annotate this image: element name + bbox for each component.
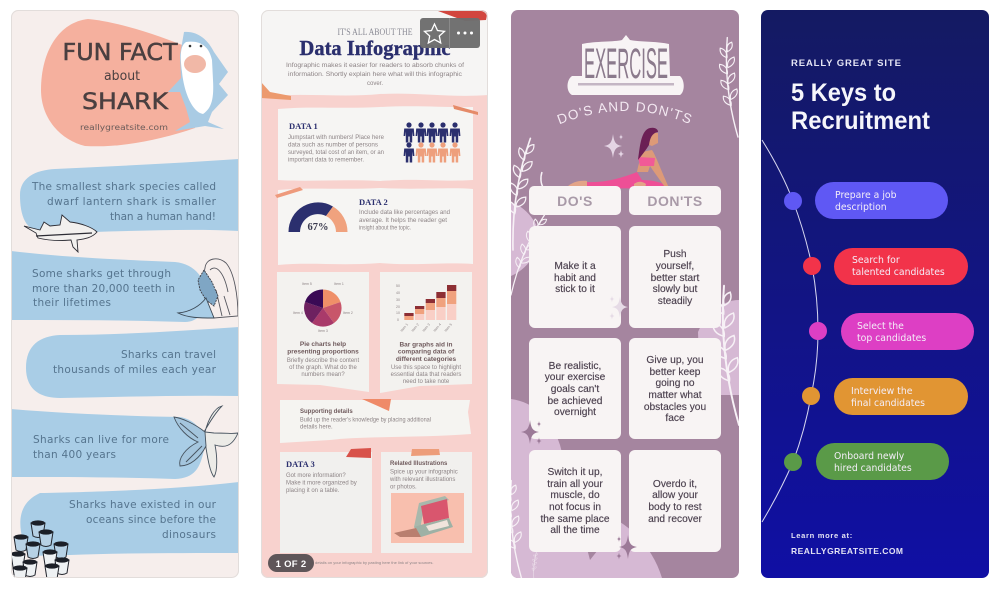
icon: sparkles (604, 134, 624, 158)
card: data 2: average. It helps the reader get (359, 218, 447, 224)
card: do 2: your exercise (545, 372, 606, 383)
exercise badge (568, 35, 684, 95)
card: don't 2: better keep (650, 367, 701, 378)
card: supporting details: Build up the reader's knowledge by placing additional (300, 418, 431, 424)
card: related illustrations: or photos. (390, 484, 417, 490)
card: related illustrations: Related Illustrations (390, 461, 448, 467)
card: do 2: overnight (554, 407, 596, 418)
card: data 3: Make it more organized by (286, 480, 357, 486)
tape on related illustrations (411, 449, 440, 456)
heading (286, 28, 464, 87)
step 2: talented candidates (852, 267, 945, 278)
band: fact 2 (11, 251, 206, 322)
band: fact 4 (11, 409, 204, 479)
card: do 3: all the time (550, 525, 600, 536)
panel: fun fact about shark (11, 10, 239, 582)
card: don't 2: obstacles you (644, 402, 706, 413)
heading: Infographic makes it easier for readers to absorb chunks of (286, 63, 464, 69)
card: do 1: Make it a (554, 261, 596, 272)
stacked bar chart: 40 (396, 291, 400, 295)
card: data 1: DATA 1 (289, 121, 318, 131)
stacked bar chart: Item 3 (422, 323, 431, 333)
card: don't 3 (629, 450, 721, 552)
fact 1 text: dwarf lantern shark is smaller (47, 196, 217, 208)
card: pie chart: Item 4 (293, 311, 303, 315)
card: pie chart: Item 5 (302, 282, 312, 286)
step 2 (803, 248, 968, 285)
tape on supporting details (362, 399, 391, 411)
band: fact 3 (26, 327, 239, 398)
step 5: Onboard newly (834, 451, 905, 462)
photo: pink box (391, 493, 464, 543)
title text: about (104, 69, 140, 84)
card: pie chart: Item 3 (318, 329, 328, 333)
card: do 3: Switch it up, (548, 467, 602, 478)
figure: yoga pose (567, 128, 670, 190)
card: do 2: be achieved (548, 396, 603, 407)
card: don't 1: slowly but (653, 284, 698, 295)
card: do 2: goals can't (551, 384, 599, 395)
card: related illustrations (381, 452, 472, 553)
icon: shark costume character (168, 32, 228, 131)
heading: IT'S ALL ABOUT THE (338, 28, 413, 38)
timeline curve (762, 140, 818, 522)
card: data 3 (280, 452, 372, 553)
icon: sparkles lower left (521, 420, 542, 445)
icon: lantern shark (24, 215, 97, 252)
icon: sparkles bottom (616, 535, 637, 560)
title text: SHARK (82, 90, 169, 115)
card: do 1 (529, 226, 621, 328)
card: don't 2: Give up, you (646, 355, 704, 366)
card: don't 3: allow your (652, 490, 699, 501)
fact 4 text (33, 434, 169, 461)
pink background (261, 94, 488, 578)
stacked bar chart: Item 5 (444, 323, 453, 333)
card: do 3: not focus in (549, 502, 601, 513)
card: don'ts header: DON'TS (647, 193, 703, 209)
fact 5 text: dinosaurs (162, 529, 216, 541)
icon: star (424, 24, 444, 43)
step 5: hired candidates (834, 463, 912, 474)
fact 2 text: more than 20,000 teeth in (32, 283, 175, 295)
footer (791, 531, 903, 556)
fact 4 text: Sharks can live for more (33, 434, 169, 446)
heading: Data Infographic (300, 36, 450, 60)
card: don't 2: face (665, 413, 685, 424)
card: data 2 (278, 188, 473, 265)
card: don't 2: going no (655, 378, 695, 389)
overlay: page badge (268, 554, 314, 572)
card: do's header (529, 186, 621, 215)
card: don't 1: yourself, (656, 261, 694, 272)
card: don'ts header (629, 186, 721, 215)
card: do 1: stick to it (555, 284, 595, 295)
card: pie chart: Briefly describe the content (287, 358, 360, 364)
stacked bar chart: 10 (396, 311, 400, 315)
step 3: top candidates (857, 333, 926, 344)
heading: cover. (367, 81, 383, 87)
overlay: favourite and menu buttons (420, 18, 480, 48)
card: data 2: DATA 2 (359, 197, 388, 207)
card: don't 3: body to rest (648, 502, 702, 513)
card: supporting details (280, 400, 471, 443)
card: do 3: muscle, do (550, 490, 600, 501)
title: Recruitment (791, 107, 931, 135)
card: don't 1 (629, 226, 721, 328)
fact 5 text: Sharks have existed in our (69, 499, 217, 511)
card: pie chart: Item 2 (343, 311, 353, 315)
icon: starfish (174, 406, 238, 477)
background blobs (511, 203, 739, 578)
card: don't 1: better start (651, 273, 700, 284)
panel: exercise do's and don'ts (511, 10, 739, 578)
stacked bar chart: Item 2 (411, 323, 420, 333)
card: data 1: surveyed, total cost of an item, or an (288, 150, 384, 156)
card: bar chart: essential data that readers (391, 372, 461, 378)
card: do 3: train all your (547, 479, 603, 490)
icon: more dots (457, 32, 473, 34)
card: data 3: DATA 3 (286, 459, 315, 469)
step 1: description (835, 202, 887, 213)
card: pie chart: numbers mean? (301, 372, 345, 378)
card: related illustrations: Spice up your infographic (390, 470, 458, 476)
card: don't 3: Overdo it, (653, 479, 697, 490)
overlay: page badge: 1 OF 2 (276, 559, 306, 570)
fact 2 text (32, 269, 174, 306)
pie chart (304, 289, 342, 327)
stacked bar chart (396, 284, 456, 333)
fact 5 text: oceans since before the (86, 514, 216, 526)
step 3: Select the (857, 321, 904, 332)
icon: shark jaw (178, 259, 238, 318)
stacked bar chart: 50 (396, 284, 400, 288)
card: bar chart: different categories (396, 356, 457, 363)
card: bar chart: Bar graphs aid in (399, 342, 453, 348)
card: don't 2 (629, 338, 721, 439)
stacked bar chart: Item 1 (400, 323, 409, 333)
card: pie chart: Pie charts help (300, 341, 346, 348)
card: data 1 (278, 106, 473, 181)
title blob (41, 19, 195, 146)
tape on data 1 (453, 105, 478, 115)
card: data 3: placing it on a table. (286, 488, 340, 494)
panel: 5 keys to recruitment (761, 10, 989, 578)
card: don't 2: matter what (648, 390, 702, 401)
title text (62, 40, 178, 132)
stacked bar chart: 0 (397, 318, 399, 322)
fact 2 text: Some sharks get through (32, 268, 171, 280)
fact 2 text: their lifetimes (33, 297, 111, 309)
card: data 3: Got more information? (286, 473, 346, 479)
footer: Learn more at: (791, 531, 853, 540)
card: data 2: insight about the topic. (359, 226, 411, 232)
fact 5 text (70, 500, 216, 538)
curved subtitle: DO'S AND DON'TS (557, 102, 692, 124)
stem behind header card (541, 172, 543, 187)
icon: barnacles (11, 520, 69, 582)
icon: sparkles mid (609, 296, 628, 320)
step 4: final candidates (851, 398, 925, 409)
card: data 1: data such as number of persons (288, 142, 378, 148)
botanical sprigs (499, 37, 744, 581)
icon: people pictogram (404, 122, 460, 162)
card: do 2 (529, 338, 621, 439)
footer: REALLYGREATSITE.COM (791, 546, 903, 556)
card: don't 3: and recover (648, 514, 702, 525)
card: don't 1: Push (663, 249, 687, 260)
card: data 2: Include data like percentages and (359, 210, 450, 216)
step 4 (802, 378, 968, 415)
card: do 1: habit and (554, 273, 596, 284)
fact 3 text: Sharks can travel (121, 349, 216, 361)
card: don't 1: steadily (658, 296, 693, 307)
tape on data 3 (346, 448, 371, 458)
title (791, 79, 931, 135)
title text: FUN FACT (62, 40, 178, 66)
band: fact 5 (20, 482, 239, 556)
torn tape left (261, 82, 291, 100)
heading: information. Shortly explain here what will this infographic (288, 72, 462, 78)
card: do 2: Be realistic, (549, 361, 601, 372)
card: related illustrations: with relevant illustrations (389, 477, 455, 483)
fact 3 text (53, 349, 217, 376)
fact 4 text: than 400 years (33, 449, 116, 461)
step 3 (809, 313, 974, 350)
fact 1 text: The smallest shark species called (31, 181, 216, 193)
footnote: details on your infographic by pasting here the link of your sources. (315, 560, 434, 565)
panel: exercise do's and don'ts: EXERCISE (584, 40, 668, 88)
card: data 1: important data to remember. (288, 158, 364, 164)
card: data 1: Jumpstart with numbers! Place here (288, 135, 385, 141)
card: bar chart: comparing data of (398, 348, 455, 356)
card: do 3 (529, 450, 621, 552)
step 1: Prepare a job (835, 190, 897, 201)
fact 1 text: than a human hand! (110, 211, 216, 223)
step 1 (784, 182, 948, 219)
card: do 3: the same place (540, 514, 610, 525)
card: bar chart: need to take note (403, 379, 450, 385)
step 4: Interview the (851, 386, 913, 397)
stacked bar chart: 20 (396, 305, 400, 309)
card: pie chart: presenting proportions (287, 348, 359, 356)
card: do's header: DO'S (557, 193, 593, 209)
card: pie chart (277, 272, 369, 392)
card: supporting details: Supporting details (300, 409, 353, 415)
gauge 67% (288, 202, 348, 233)
card: supporting details: details here. (300, 424, 333, 430)
fact 3 text: thousands of miles each year (53, 364, 217, 376)
eyebrow: REALLY GREAT SITE (791, 58, 902, 69)
title text: reallygreatsite.com (80, 123, 168, 132)
gauge 67%: 67% (308, 222, 328, 233)
stacked bar chart: 30 (396, 298, 400, 302)
fact 1 text (32, 182, 216, 220)
step 2: Search for (852, 255, 900, 266)
step 5 (784, 443, 949, 480)
card: pie chart: of the graph. What do the (289, 365, 358, 371)
card: bar chart: Use this space to highlight (391, 365, 461, 371)
title: 5 Keys to (791, 79, 896, 107)
stacked bar chart: Item 4 (433, 323, 442, 333)
tape on data 2 (275, 187, 303, 198)
torn tape corner (438, 10, 488, 21)
card: bar chart (380, 272, 472, 393)
panel: data infographic (261, 10, 488, 578)
card: pie chart: Item 1 (334, 282, 344, 286)
band: fact 1 (20, 159, 239, 233)
